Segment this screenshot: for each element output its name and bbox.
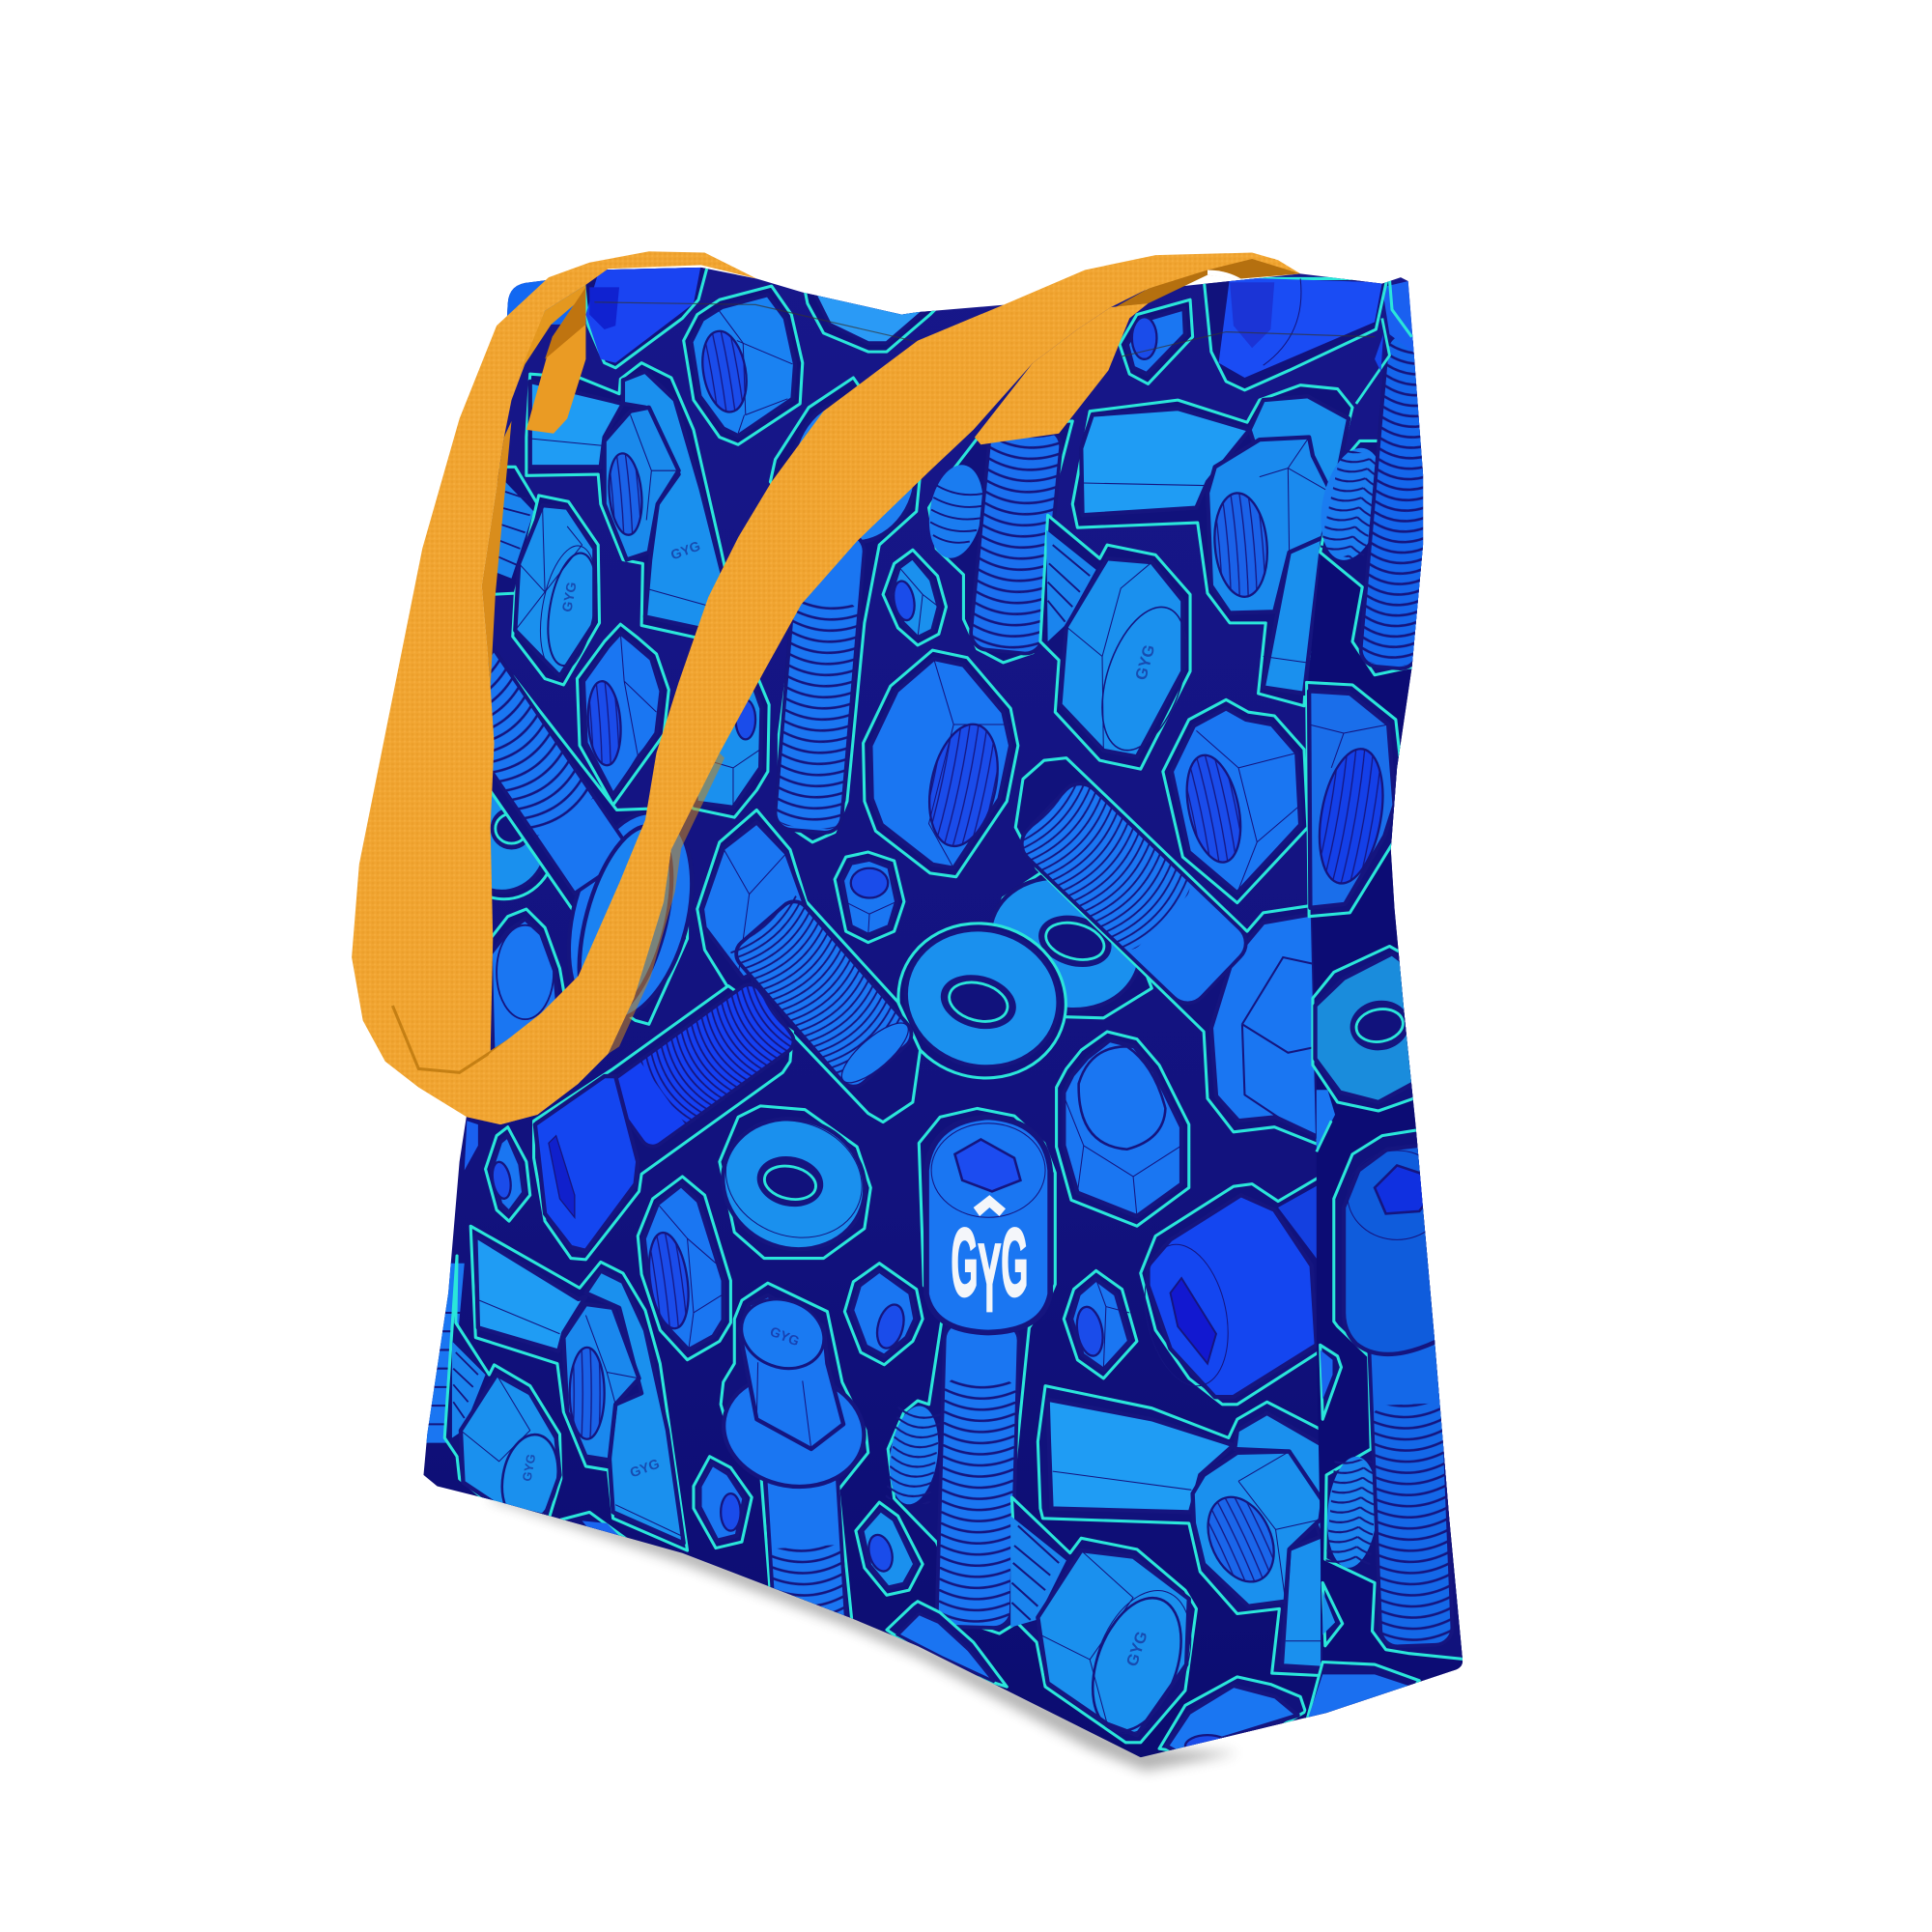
thread strip left edge bbox=[427, 1264, 465, 1443]
hex head bolt centre right bbox=[1040, 515, 1203, 769]
wing bolt upper left bbox=[526, 363, 730, 638]
diagonal bolt centre left bbox=[697, 810, 921, 1122]
right strap flap bbox=[975, 303, 1148, 444]
vertical threaded bolt top right bbox=[923, 421, 1099, 663]
bottom washer centre bbox=[887, 1602, 1007, 1687]
small nut centre bbox=[883, 550, 946, 645]
small nut middle bbox=[835, 852, 904, 943]
wing bolt upper left: GYG bbox=[668, 538, 702, 562]
bag body bbox=[409, 247, 1486, 1783]
dark cylinder bolt right bbox=[1133, 1177, 1321, 1405]
large diagonal bolt bbox=[1013, 758, 1318, 1145]
dark bolt bbox=[534, 980, 799, 1260]
washers centre bbox=[896, 872, 1153, 1080]
washer left bbox=[491, 796, 548, 900]
washer lower centre bbox=[718, 1104, 872, 1260]
nut centre right bbox=[1163, 699, 1308, 903]
right shoulder strap bbox=[467, 253, 1300, 1124]
blue sliver under strap bbox=[465, 1121, 478, 1171]
flange bolt: GYG bbox=[768, 1323, 802, 1349]
hex bolt head left bbox=[513, 496, 606, 685]
flange bolt bbox=[719, 1281, 869, 1619]
thread stub behind hex bolt bbox=[491, 467, 537, 594]
back panel corner bbox=[506, 280, 587, 325]
egg cap left bbox=[486, 909, 565, 1059]
vertical bolt centre top bbox=[770, 378, 921, 842]
left shoulder strap bbox=[352, 251, 756, 1124]
bottom left nub bbox=[561, 1512, 631, 1542]
bottom cap right bbox=[1159, 1677, 1305, 1759]
tote bag product illustration bbox=[352, 251, 1463, 1777]
hex head bolt bottom centre: GYG bbox=[1122, 1629, 1151, 1668]
hex head top right bbox=[1204, 277, 1387, 390]
side gusset panel bbox=[1304, 463, 1486, 1734]
large nut centre bbox=[864, 650, 1018, 877]
white gap under strap bbox=[1208, 270, 1241, 278]
ground shadow bbox=[489, 1493, 1238, 1771]
small nut lower left bbox=[486, 1127, 530, 1221]
wing bolt lower left bbox=[470, 1226, 688, 1550]
hex head bolt bottom centre bbox=[1010, 1497, 1209, 1747]
cap nut bbox=[1057, 1032, 1189, 1226]
nut lower centre left bbox=[638, 1177, 730, 1360]
small nut right of logo bolt bbox=[1064, 1270, 1137, 1378]
side washer bbox=[1313, 946, 1424, 1111]
bottom side panel piece bbox=[1307, 1662, 1419, 1721]
nut top bbox=[684, 286, 803, 444]
hex bolt head left: GYG bbox=[558, 581, 580, 613]
nut behind strap bbox=[692, 678, 771, 819]
threaded bolt side panel top bbox=[1312, 332, 1445, 675]
threaded bolt left bbox=[488, 653, 690, 1026]
side nut bbox=[1307, 682, 1406, 917]
logo mark: G bbox=[951, 1208, 978, 1316]
socket head bolt side panel bbox=[1322, 1127, 1467, 1660]
hex head bolt centre right: GYG bbox=[1131, 642, 1158, 682]
washer top centre bbox=[804, 292, 936, 354]
top right corner strip bbox=[1356, 280, 1414, 404]
socket head bolt with logo bbox=[884, 1108, 1055, 1634]
wing bolt lower left: GYG bbox=[628, 1456, 662, 1480]
slivers beside gusset bbox=[1317, 1090, 1343, 1646]
small nut top right bbox=[1120, 299, 1193, 384]
hex head top left bbox=[582, 263, 708, 368]
logo mark: G bbox=[1001, 1208, 1028, 1316]
strap underside right bbox=[1111, 256, 1300, 322]
wing bolt upper right bbox=[1072, 385, 1352, 706]
logo mark: Y bbox=[978, 1223, 1001, 1331]
hex bolt bottom left: GYG bbox=[520, 1453, 538, 1483]
hex bolt bottom left bbox=[444, 1256, 565, 1527]
wing bolt lower right bbox=[1037, 1386, 1322, 1676]
small nuts lower centre bbox=[694, 1264, 923, 1595]
left strap flap bbox=[526, 287, 585, 434]
nut left bbox=[577, 624, 668, 805]
logo mark bbox=[952, 1195, 1027, 1312]
top rim seam bbox=[594, 302, 1375, 356]
